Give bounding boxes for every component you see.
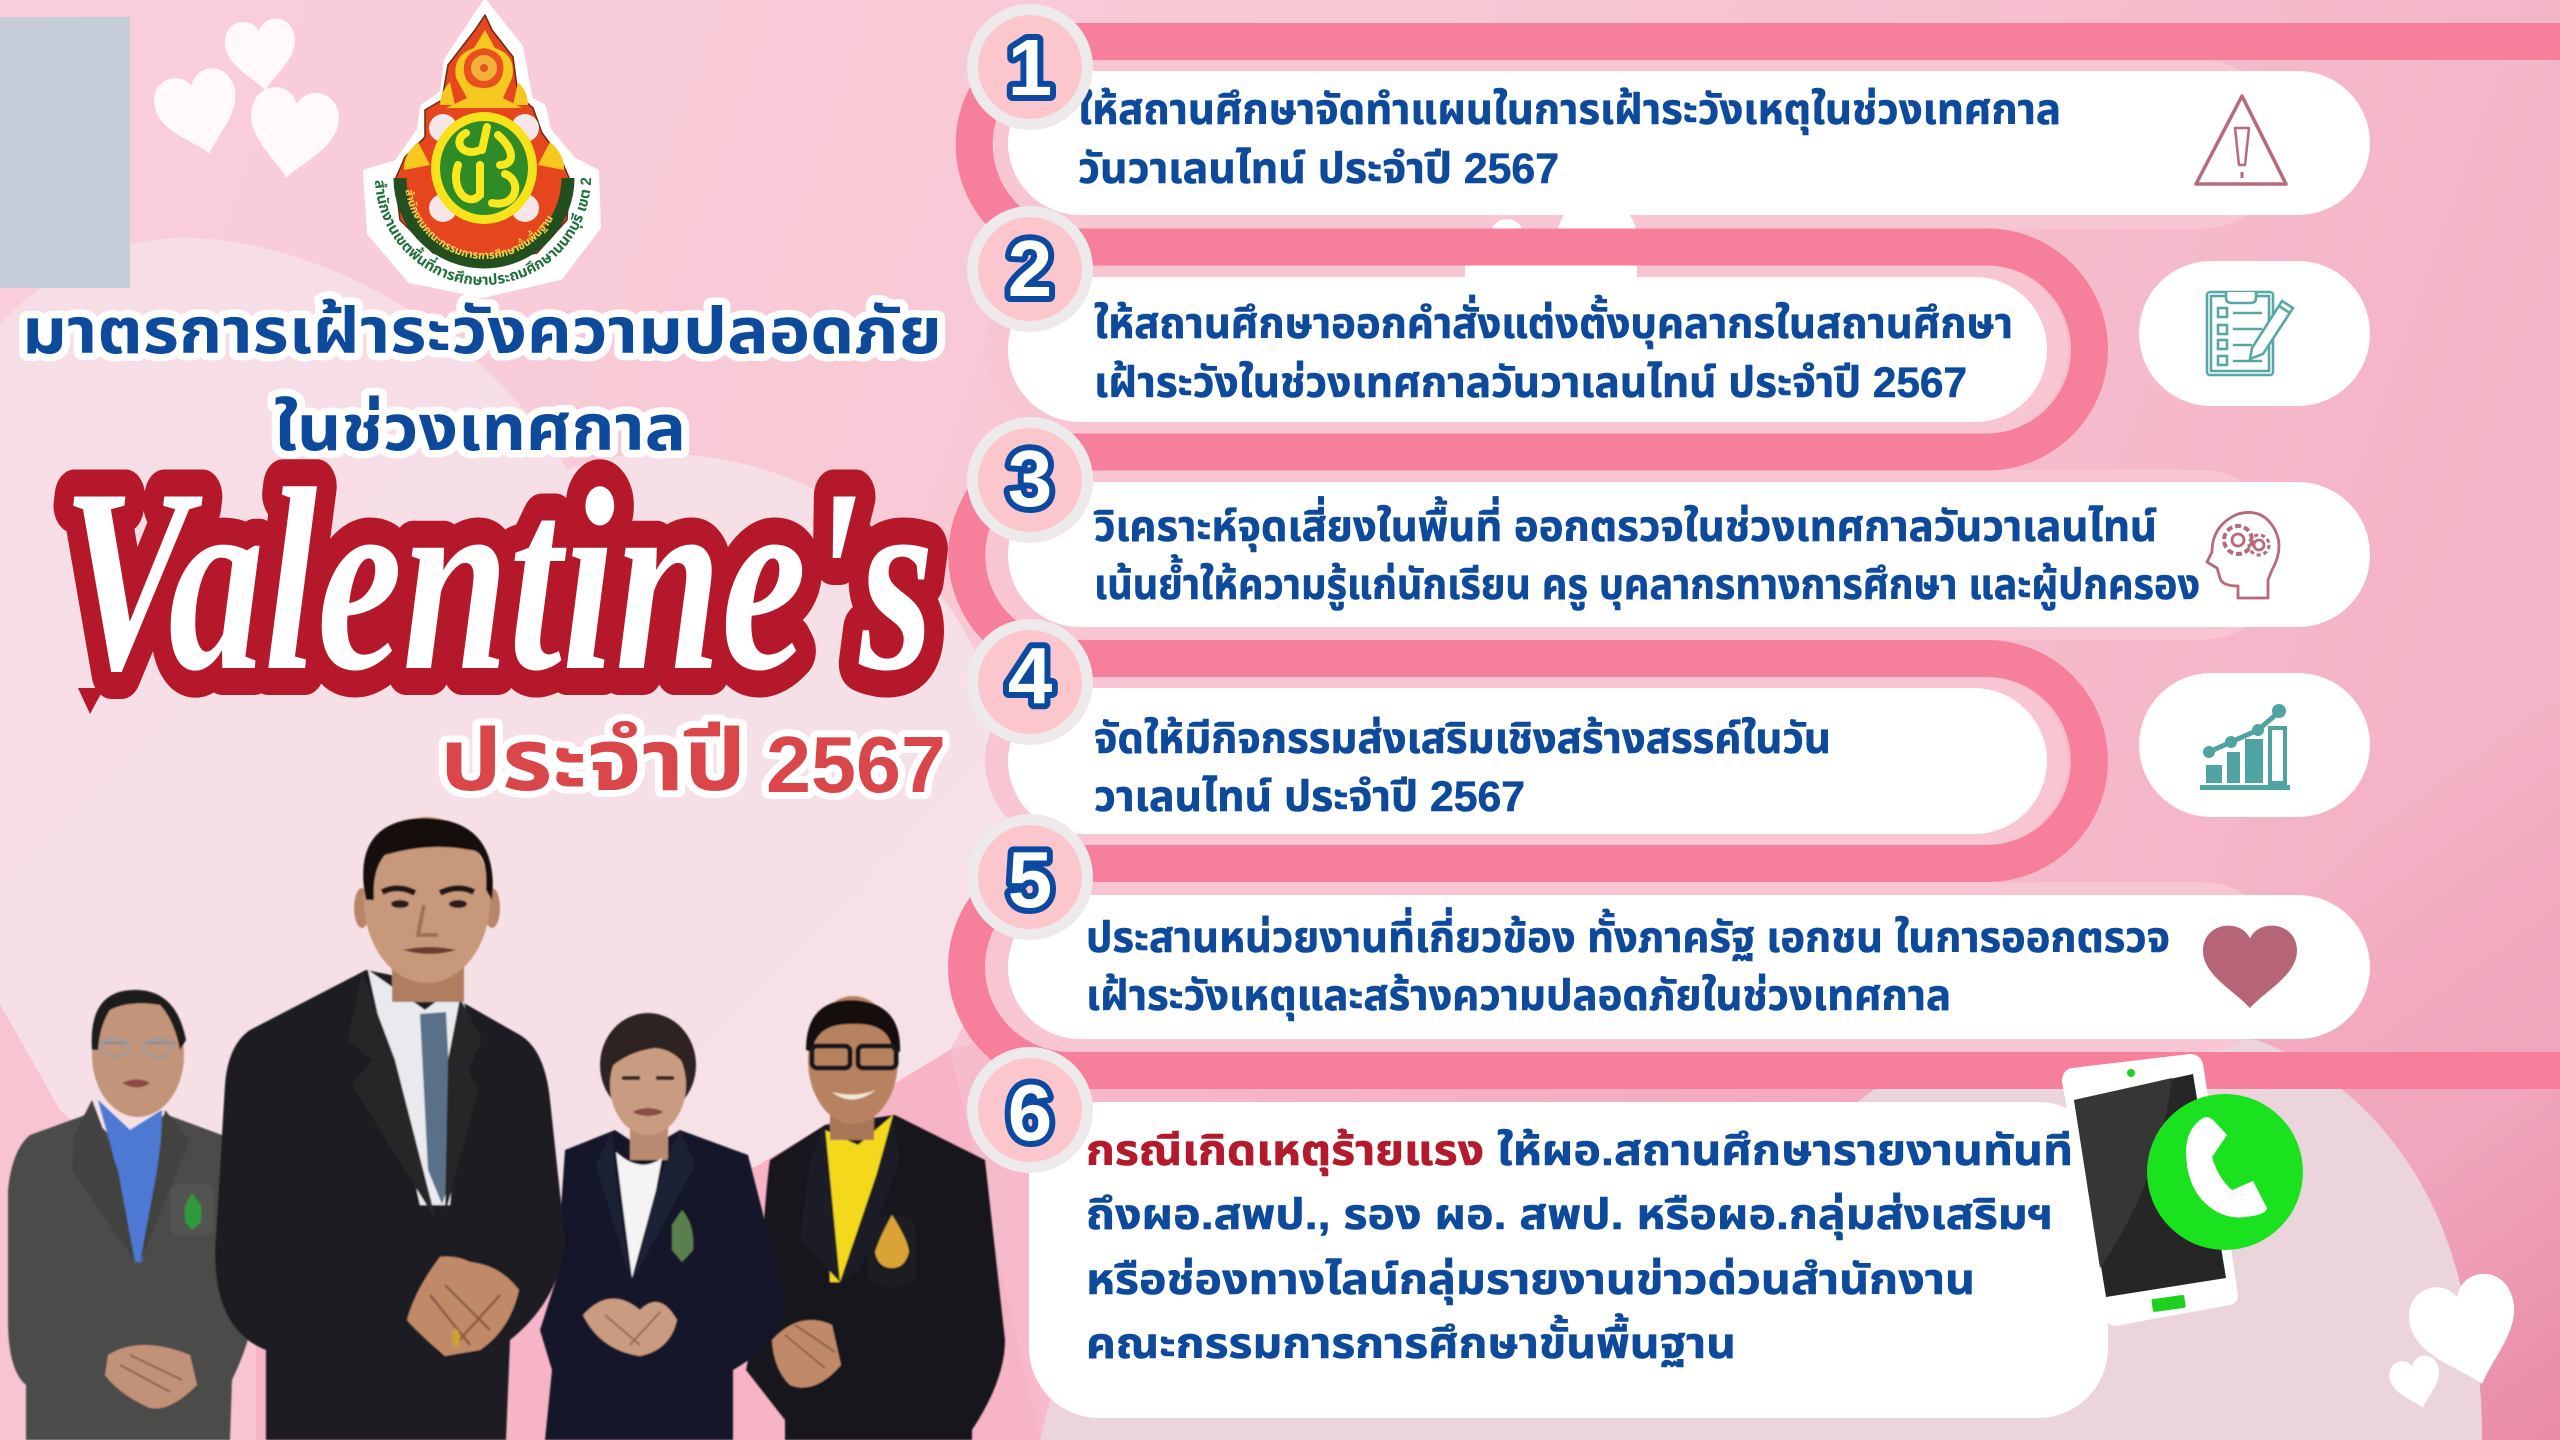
step 6 panel [1029, 1102, 2108, 1418]
number badge 2: 2 [1008, 224, 1052, 313]
number badge 6: 6 [1008, 1068, 1052, 1157]
icon: head with gears [2207, 512, 2279, 598]
step 3 panel [1008, 482, 2370, 627]
step 6 panel: กรณีเกิดเหตุร้ายแรง [1086, 1127, 1484, 1176]
step 5 panel [1008, 895, 2370, 1039]
hearts bottom right [2386, 1267, 2533, 1414]
step 2 panel: เฝ้าระวังในช่วงเทศกาลวันวาเลนไทน์ ประจำปี 2567 [1094, 359, 1967, 407]
number badge 3 [967, 417, 1093, 543]
snake ribbon path [966, 42, 2560, 1070]
person: left man in gray suit [8, 990, 256, 1440]
icon: heart [2203, 926, 2297, 1008]
number badge 1: 1 [1008, 23, 1052, 112]
step 2 icon pill [2139, 261, 2370, 406]
step 5 panel: ประสานหน่วยงานที่เกี่ยวข้อง ทั้งภาครัฐ เอกชน ในการออกตรวจ [1086, 907, 2170, 962]
step 2 panel [1008, 277, 2047, 422]
subtitle year: ประจำปี [440, 713, 746, 809]
people group [8, 817, 1005, 1440]
seal outer ring text: สำนักงานเขตพื้นที่การศึกษาประถมศึกษานนทบุรี เขต 2 [374, 178, 592, 286]
person: central man in black suit [215, 817, 565, 1440]
icon: clipboard and pencil [2207, 292, 2293, 375]
step 6 panel: ถึงผอ.สพป., รอง ผอ. สพป. หรือผอ.กลุ่มส่งเสริมฯ [1086, 1191, 2053, 1240]
number badge 3: 3 [1008, 434, 1052, 523]
step 5 panel: เฝ้าระวังเหตุและสร้างความปลอดภัยในช่วงเทศกาล [1086, 972, 1951, 1021]
step 6 panel: หรือช่องทางไลน์กลุ่มรายงานข่าวด่วนสำนักงาน [1086, 1256, 1975, 1305]
step 1 panel [1008, 71, 2370, 215]
seal inner ring text: สำนักงานคณะกรรมการการศึกษาขั้นพื้นฐาน [406, 190, 553, 260]
number badge 5: 5 [1008, 835, 1052, 924]
step 4 panel: จัดให้มีกิจกรรมส่งเสริมเชิงสร้างสรรค์ในวัน [1094, 715, 1831, 763]
step 1 panel: ให้สถานศึกษาจัดทำแผนในการเฝ้าระวังเหตุในช่วงเทศกาล [1078, 86, 2061, 135]
step 6 panel: คณะกรรมการการศึกษาขั้นพื้นฐาน [1086, 1313, 1736, 1368]
step 6 panel: ให้ผอ.สถานศึกษารายงานทันที [1497, 1127, 2073, 1175]
person: woman in navy suit [540, 1013, 785, 1440]
number badge 1 [967, 4, 1093, 130]
number badge 4: 4 [1008, 631, 1053, 720]
lighter inner ribbon panels [985, 60, 2285, 1052]
number badge 4 [967, 619, 1093, 745]
title: มาตรการเฝ้าระวังความปลอดภัย [22, 295, 942, 367]
seal lotus flowers [429, 114, 539, 222]
number badge 5 [967, 814, 1093, 940]
logo: education office seal [363, 0, 601, 298]
step 2 panel: ให้สถานศึกษาออกคำสั่งแต่งตั้งบุคลากรในสถานศึกษา [1094, 295, 2013, 349]
number badge 6 [967, 1047, 1093, 1173]
gray rectangle top left [0, 17, 130, 288]
step 1 panel: วันวาเลนไทน์ ประจำปี 2567 [1078, 145, 1559, 193]
step 4 panel [1008, 688, 2047, 834]
step 4 panel: วาเลนไทน์ ประจำปี 2567 [1094, 773, 1525, 821]
number badge 2 [967, 206, 1093, 332]
seal side flames [404, 82, 564, 170]
subtitle year [440, 713, 946, 809]
icon: smartphone with green call button [2062, 1054, 2303, 1326]
valentine's lettering: Valentine's [62, 435, 934, 725]
step 4 icon pill [2139, 673, 2370, 817]
step 3 panel: เน้นย้ำให้ความรู้แก่นักเรียน ครู บุคลากรทางการศึกษา และผู้ปกครอง [1094, 554, 2200, 610]
icon: rising bar chart [2200, 704, 2290, 790]
title [22, 295, 942, 464]
person: right man in black suit with yellow shirt [746, 996, 1005, 1440]
step 3 panel: วิเคราะห์จุดเสี่ยงในพื้นที่ ออกตรวจในช่วงเทศกาลวันวาเลนไทน์ [1093, 496, 2157, 552]
subtitle year: 2567 [766, 720, 946, 809]
hearts top left [149, 17, 342, 184]
title: ในช่วงเทศกาล [274, 392, 686, 464]
white blobs behind ribbon [1465, 198, 1637, 280]
icon: warning triangle [2196, 96, 2286, 184]
